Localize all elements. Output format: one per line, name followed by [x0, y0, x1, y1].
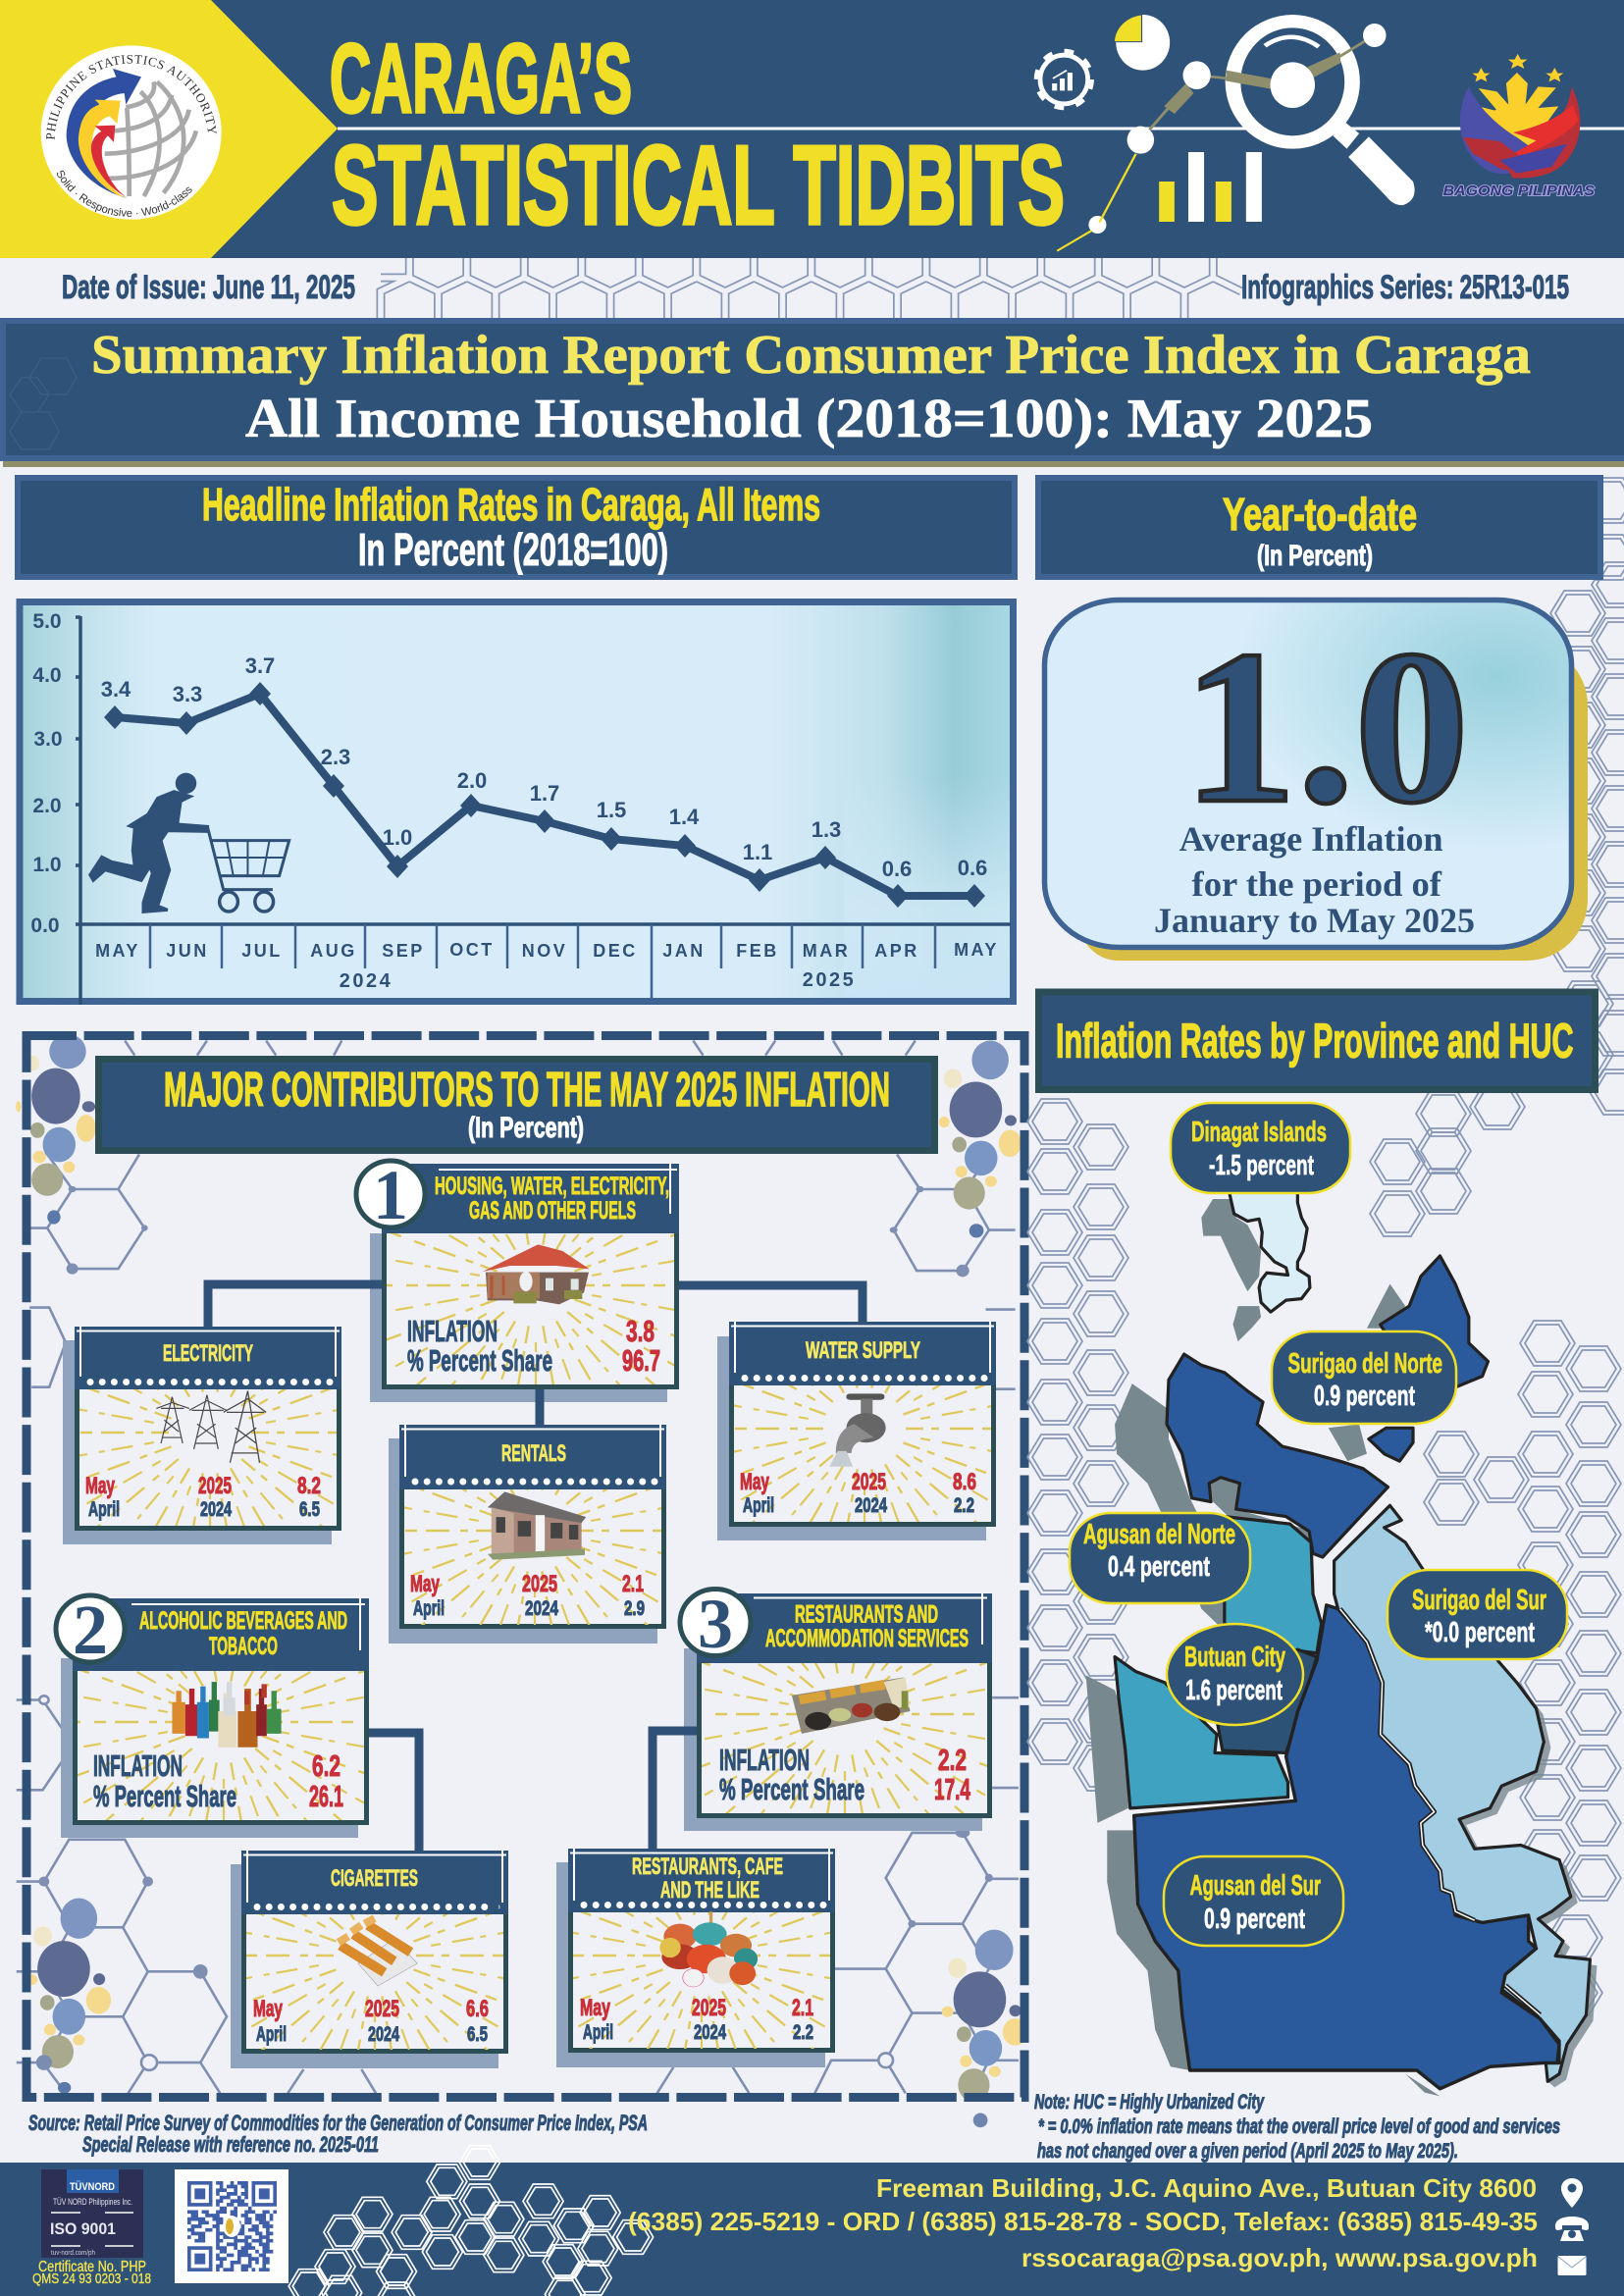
caption line 3: January to May 2025 — [1154, 901, 1475, 940]
map note — [1034, 2091, 1560, 2163]
callout: Agusan del Norte: Agusan del Norte — [1083, 1519, 1235, 1550]
badge 2 — [56, 1591, 125, 1669]
stats: 2025 — [852, 1469, 886, 1495]
callout: Dinagat Islands — [1171, 1103, 1350, 1193]
card: cigarettes — [149, 1730, 601, 2181]
icon: data analysis graphic — [1037, 15, 1415, 251]
map: Caraga provinces — [1086, 1191, 1597, 2096]
stats: 2.1 — [792, 1995, 813, 2021]
inflation value: 2.2 — [938, 1743, 967, 1777]
date of issue: Date of Issue: June 11, 2025 — [62, 269, 355, 306]
stats: April — [583, 2021, 613, 2044]
card: electricity — [0, 1207, 436, 1658]
panel: major contributors — [0, 1034, 1090, 2181]
line chart: headline inflation — [20, 602, 1013, 1005]
inflation value: 6.2 — [312, 1748, 341, 1783]
data labels: 1.7 — [530, 781, 559, 806]
map shadows — [1086, 1199, 1597, 2096]
data labels: 2.0 — [457, 768, 487, 793]
stats: 2.2 — [954, 1494, 974, 1517]
month labels: NOV — [522, 941, 567, 961]
icon: food trays — [792, 1678, 910, 1734]
certificate number: Certificate No. PHP — [38, 2259, 146, 2275]
month labels: MAY — [95, 941, 140, 961]
decorative bubbles top — [16, 1034, 1022, 1237]
data labels: 1.1 — [743, 840, 772, 864]
caption line 2: for the period of — [1191, 864, 1442, 904]
data labels: 1.4 — [669, 805, 700, 829]
heading text: MAJOR CONTRIBUTORS TO THE MAY 2025 INFLATION — [164, 1064, 890, 1117]
stats: 2024 — [368, 2023, 399, 2046]
icon: transmission towers — [156, 1391, 266, 1463]
region: Agusan del Norte — [1115, 1517, 1322, 1808]
ISO certification badge: TÜV NORD Philippines Inc. — [53, 2197, 132, 2207]
certificate number — [32, 2259, 151, 2287]
callout: Surigao del Norte: Surigao del Norte — [1287, 1348, 1442, 1380]
icon: townhouse — [488, 1491, 586, 1560]
stats: 2025 — [365, 1996, 399, 2022]
card 1 title line 2: GAS AND OTHER FUELS — [469, 1197, 636, 1225]
stats — [410, 1571, 645, 1620]
callout: Dinagat Islands: Dinagat Islands — [1191, 1117, 1327, 1148]
stats: April — [413, 1597, 445, 1620]
y axis labels: 0.0 — [30, 914, 60, 937]
yellow chevron — [0, 0, 338, 258]
panel: year-to-date card — [1044, 600, 1588, 961]
stats: May — [580, 1995, 610, 2021]
source note: Source: Retail Price Survey of Commodities for the Generation of Consumer Price Index, PSA — [28, 2111, 648, 2135]
card 2: alcoholic beverages and tobacco — [0, 1496, 449, 1948]
callout: Dinagat Islands: -1.5 percent — [1209, 1150, 1314, 1181]
y axis labels — [30, 610, 63, 937]
logo: Bagong Pilipinas: BAGONG PILIPINAS — [1443, 183, 1595, 199]
month labels: APR — [874, 941, 919, 961]
dashed frame — [26, 1036, 1024, 2098]
month labels: MAY — [954, 940, 999, 960]
month labels: FEB — [736, 941, 779, 961]
logo: Philippine Statistics Authority: Solid · Responsive · World-class — [57, 171, 192, 217]
panel: year-to-date heading — [1038, 478, 1600, 577]
stats: 2024 — [855, 1494, 887, 1517]
callout: Agusan del Norte: 0.4 percent — [1108, 1551, 1210, 1583]
callout: Surigao del Sur: *0.0 percent — [1425, 1617, 1535, 1648]
badge 1 — [356, 1156, 425, 1234]
region: Surigao del Sur — [1335, 1505, 1590, 2081]
banner line 1: Summary Inflation Report Consumer Price Index in Caraga — [91, 325, 1531, 386]
data labels: 3.3 — [173, 682, 202, 706]
month labels: AUG — [310, 941, 357, 961]
callout: Surigao del Sur: Surigao del Sur — [1412, 1585, 1546, 1616]
card 2 title: ALCOHOLIC BEVERAGES AND — [139, 1607, 347, 1635]
stats: 8.6 — [953, 1469, 976, 1495]
icon: food platter — [659, 1911, 758, 1987]
map background hexagons — [1027, 981, 1624, 2015]
stats: 2.2 — [793, 2021, 813, 2044]
card 2 title line 2: TOBACCO — [209, 1633, 278, 1660]
stats: May — [410, 1571, 440, 1597]
stats: May — [85, 1473, 115, 1499]
card 3 title line 2: ACCOMMODATION SERVICES — [765, 1625, 969, 1652]
region: Dinagat Islands — [1230, 1191, 1310, 1312]
certificate number: QMS 24 93 0203 - 018 — [32, 2270, 151, 2287]
stats — [253, 1996, 489, 2046]
header band — [0, 0, 1624, 258]
hexagon strip behind date row — [381, 258, 1241, 318]
callout: Surigao del Norte — [1272, 1331, 1456, 1424]
month labels: MAR — [803, 941, 850, 961]
region: Surigao del Norte — [1167, 1256, 1488, 1557]
badge 3: 3 — [698, 1585, 733, 1663]
icon: telephone — [1555, 2217, 1589, 2241]
caption line 1: Average Inflation — [1179, 819, 1443, 859]
stats: 2024 — [200, 1498, 232, 1521]
stats — [740, 1469, 976, 1517]
background hexagons right column — [1550, 478, 1624, 999]
title: ELECTRICITY — [163, 1340, 253, 1367]
title: Caraga's: CARAGA’S — [330, 24, 632, 132]
unit: (In Percent) — [468, 1112, 584, 1144]
data labels — [101, 653, 987, 881]
callout: Agusan del Sur — [1164, 1856, 1343, 1946]
card 3: restaurants and accommodation — [619, 1488, 1071, 1940]
month labels: JAN — [662, 941, 706, 961]
big value: 1.0 — [1182, 605, 1469, 849]
year 2025: 2025 — [803, 969, 856, 991]
inflation label: INFLATION — [719, 1743, 810, 1777]
data labels: 1.0 — [383, 825, 412, 850]
icon: envelope — [1558, 2256, 1586, 2275]
ISO certification badge: tuv-nord.com/ph — [51, 2250, 95, 2257]
map heading — [1038, 992, 1596, 1089]
region: Agusan del Sur — [1134, 1605, 1559, 2089]
title line 2: AND THE LIKE — [660, 1877, 760, 1904]
card: restaurants, cafe and the like — [476, 1730, 927, 2181]
y axis labels: 4.0 — [32, 664, 62, 687]
card: rentals — [309, 1305, 760, 1756]
ISO certification badge: TÜVNORD — [70, 2180, 115, 2193]
logo: Philippine Statistics Authority — [41, 45, 222, 220]
card 3 title: RESTAURANTS AND — [795, 1601, 938, 1629]
banner: report title — [3, 321, 1624, 467]
footer hexagon cluster — [288, 2146, 654, 2296]
banner line 2: All Income Household (2018=100): May 2025 — [245, 389, 1373, 449]
title: WATER SUPPLY — [806, 1337, 920, 1364]
stats: May — [253, 1996, 283, 2022]
stats: April — [88, 1498, 120, 1521]
month labels: JUL — [241, 941, 283, 961]
badge 1: 1 — [373, 1156, 408, 1234]
stats: 2.9 — [624, 1597, 645, 1620]
contact: phone: (6385) 225-5219 - ORD / (6385) 815-28-78 - SOCD, Telefax: (6385) 815-49-35 — [628, 2207, 1538, 2236]
percent share label: % Percent Share — [93, 1779, 236, 1813]
source note — [28, 2111, 648, 2157]
icon: shopper with cart — [90, 773, 289, 912]
data labels: 3.4 — [101, 677, 131, 702]
heading text: Year-to-date — [1223, 489, 1417, 540]
ISO certification badge — [41, 2169, 143, 2258]
data labels: 2.3 — [321, 745, 350, 769]
callout: Butuan City — [1167, 1624, 1303, 1725]
title: RESTAURANTS, CAFE — [632, 1853, 783, 1880]
month labels: JUN — [166, 941, 209, 961]
contact: address: Freeman Building, J.C. Aquino Ave., Butuan City 8600 — [876, 2173, 1537, 2203]
stats: 6.6 — [466, 1996, 489, 2022]
callout: Agusan del Sur: 0.9 percent — [1204, 1904, 1305, 1935]
data line — [115, 694, 974, 896]
background node network — [17, 1041, 1019, 2093]
data labels: 0.6 — [882, 857, 912, 881]
stats: 2025 — [198, 1473, 232, 1499]
month labels: DEC — [593, 941, 638, 961]
callout: Butuan City: Butuan City — [1184, 1642, 1285, 1673]
stats: 6.5 — [467, 2023, 488, 2046]
icon: house — [483, 1244, 590, 1304]
unit: (In Percent) — [1257, 540, 1373, 572]
stats: 2024 — [694, 2021, 726, 2044]
icon: cigarette pack — [339, 1918, 417, 1986]
data labels: 0.6 — [958, 856, 987, 880]
stats: 6.5 — [299, 1498, 320, 1521]
region: Butuan City — [1217, 1649, 1317, 1752]
card: water supply — [639, 1203, 1090, 1654]
y axis labels: 3.0 — [33, 728, 63, 751]
stats: May — [740, 1469, 769, 1495]
share value: 26.1 — [309, 1779, 343, 1813]
card 1: housing, water, electricity — [310, 1060, 761, 1511]
share value: 96.7 — [622, 1343, 660, 1378]
month labels — [95, 940, 999, 961]
logo: Philippine Statistics Authority: PHILIPPINE STATISTICS AUTHORITY — [46, 55, 217, 139]
logo: Bagong Pilipinas — [1443, 54, 1595, 199]
inflation label: INFLATION — [407, 1314, 498, 1348]
badge 3 — [680, 1585, 751, 1663]
stats: 8.2 — [297, 1473, 321, 1499]
y axis labels: 5.0 — [32, 610, 62, 633]
connectors between cards — [208, 1284, 863, 1851]
data labels: 1.3 — [812, 817, 841, 842]
title: CIGARETTES — [331, 1865, 418, 1892]
decorative bubbles bottom — [26, 1899, 1027, 2127]
month labels: SEP — [382, 941, 425, 961]
contact: email and website: rssocaraga@psa.gov.ph, www.psa.gov.ph — [1022, 2243, 1538, 2272]
y axis labels: 1.0 — [32, 854, 62, 876]
y axis labels: 2.0 — [32, 795, 62, 817]
stats: 2025 — [692, 1995, 726, 2021]
badge 2: 2 — [73, 1591, 108, 1669]
icon: bottles — [172, 1682, 282, 1748]
callout: Surigao del Norte: 0.9 percent — [1314, 1381, 1415, 1412]
map note: Note: HUC = Highly Urbanized City — [1034, 2091, 1265, 2113]
stats — [580, 1995, 813, 2044]
heading line 2: In Percent (2018=100) — [358, 524, 668, 575]
callout: Agusan del Sur: Agusan del Sur — [1189, 1870, 1321, 1902]
data labels: 3.7 — [245, 653, 275, 678]
data labels: 1.5 — [597, 798, 626, 822]
stats: April — [743, 1494, 774, 1517]
inflation value: 3.8 — [626, 1314, 655, 1348]
source note: Special Release with reference no. 2025-011 — [82, 2132, 379, 2157]
title: Statistical Tidbits: STATISTICAL TIDBITS — [332, 124, 1065, 248]
year 2024: 2024 — [340, 970, 393, 992]
percent share label: % Percent Share — [719, 1772, 864, 1806]
stats — [85, 1473, 321, 1521]
callout: Surigao del Sur — [1388, 1570, 1567, 1659]
stats: April — [256, 2023, 287, 2046]
stats: 2025 — [522, 1571, 557, 1597]
contributors heading — [98, 1060, 934, 1150]
callout: Agusan del Norte — [1070, 1513, 1250, 1603]
map note: has not changed over a given period (April 2025 to May 2025). — [1037, 2140, 1458, 2163]
data markers — [104, 682, 985, 908]
ISO certification badge: ISO 9001 — [50, 2219, 116, 2238]
panel: headline heading — [18, 478, 1015, 577]
stats: 2.1 — [622, 1571, 644, 1597]
inflation label: INFLATION — [93, 1748, 183, 1783]
stats: 2024 — [525, 1597, 558, 1620]
card 1 title: HOUSING, WATER, ELECTRICITY, — [435, 1173, 669, 1200]
heading line 1: Headline Inflation Rates in Caraga, All Items — [202, 479, 820, 530]
icon: faucet — [829, 1393, 886, 1467]
icon: map pin — [1561, 2178, 1583, 2208]
title: RENTALS — [501, 1440, 566, 1467]
callout: Butuan City: 1.6 percent — [1185, 1675, 1283, 1706]
percent share label: % Percent Share — [407, 1343, 552, 1378]
month labels: OCT — [449, 940, 495, 960]
share value: 17.4 — [934, 1772, 970, 1806]
footer — [0, 2146, 1624, 2296]
QR code — [175, 2169, 288, 2283]
